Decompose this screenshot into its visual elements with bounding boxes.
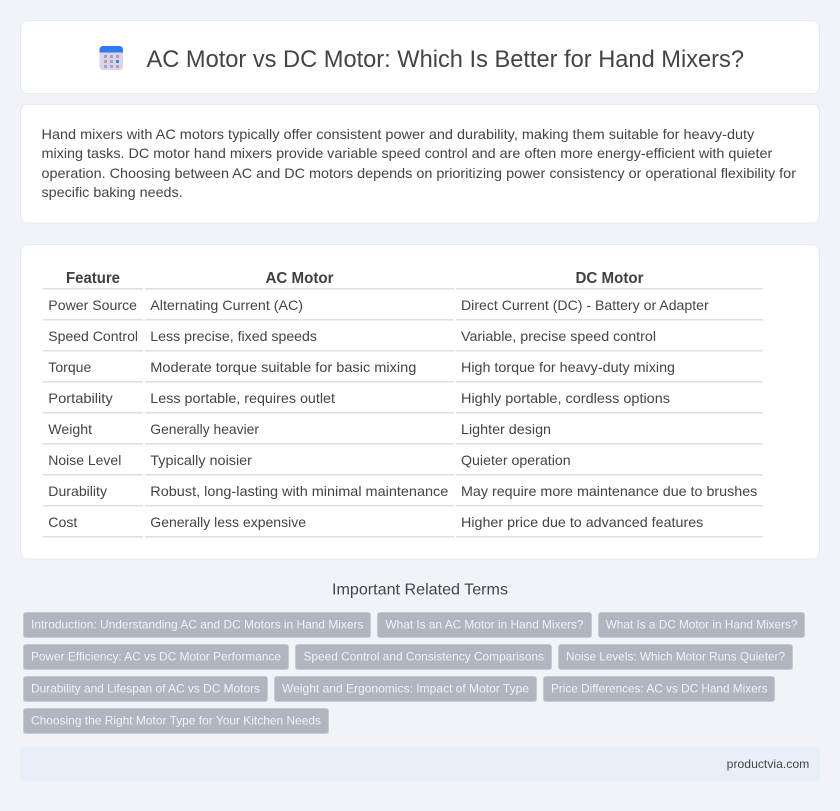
tag: Choosing the Right Motor Type for Your Kitchen Needs — [31, 714, 321, 728]
table row: portability: Highly portable, cordless options — [461, 390, 670, 406]
table row: power source: Direct Current (DC) - Battery or Adapter — [461, 297, 709, 313]
table row: durability: Robust, long-lasting with minimal maintenance — [150, 483, 449, 499]
table row: durability: Durability — [48, 483, 107, 499]
text block: introduction paragraph: Hand mixers with AC motors typically offer consistent power and durability, making them suitable for heavy-duty — [42, 126, 754, 142]
tag: Weight and Ergonomics: Impact of Motor Type — [282, 682, 529, 696]
tag — [558, 644, 792, 670]
table row: durability — [48, 483, 757, 499]
table row: noise level — [48, 452, 571, 468]
table row: portability — [48, 390, 670, 406]
table row: noise level: Noise Level — [48, 452, 121, 468]
tag — [378, 612, 592, 638]
table row: portability: Less portable, requires outlet — [150, 390, 335, 406]
icon: calendar grid — [100, 46, 123, 70]
tag — [274, 676, 536, 702]
table row: cost: Higher price due to advanced features — [461, 514, 703, 530]
panel: introduction — [20, 104, 820, 223]
table row: speed control: Speed Control — [48, 328, 138, 344]
table row: noise level: Typically noisier — [150, 452, 252, 468]
table row: speed control — [48, 328, 656, 344]
table row: power source — [48, 297, 709, 313]
tag: Introduction: Understanding AC and DC Motors in Hand Mixers — [31, 618, 364, 632]
table header row: AC Motor — [266, 270, 334, 287]
table row: torque — [48, 359, 675, 375]
tag — [598, 612, 804, 638]
table header row — [66, 270, 644, 287]
tag — [24, 644, 288, 670]
table row: speed control: Variable, precise speed control — [461, 328, 656, 344]
table row: cost — [48, 514, 703, 530]
table row: power source: Alternating Current (AC) — [150, 297, 303, 313]
table row: weight: Weight — [48, 421, 92, 437]
table row: torque: Moderate torque suitable for basic mixing — [150, 359, 416, 375]
tag — [24, 612, 370, 638]
table row: weight — [48, 421, 551, 437]
tag: Noise Levels: Which Motor Runs Quieter? — [566, 650, 785, 664]
table row: portability: Portability — [48, 390, 113, 406]
panel: comparison table — [20, 244, 820, 559]
tag — [24, 708, 328, 734]
tag: Durability and Lifespan of AC vs DC Motors — [31, 682, 260, 696]
text block: introduction paragraph: specific baking needs. — [42, 184, 183, 200]
title: AC Motor vs DC Motor: Which Is Better for Hand Mixers? — [146, 46, 744, 73]
table row: torque: High torque for heavy-duty mixing — [461, 359, 675, 375]
table row: noise level: Quieter operation — [461, 452, 571, 468]
tag — [544, 676, 774, 702]
table header row: DC Motor — [576, 270, 644, 287]
text block: introduction paragraph: operation. Choosing between AC and DC motors depends on prioritizing power consistency or operational flexibility for — [42, 165, 796, 181]
tag — [24, 676, 268, 702]
text block: introduction paragraph: mixing tasks. DC motor hand mixers provide variable speed control and are often more energy-efficient with quieter — [42, 145, 773, 161]
panel: footer — [20, 747, 820, 781]
tag: Power Efficiency: AC vs DC Motor Performance — [31, 650, 281, 664]
table row: weight: Generally heavier — [150, 421, 259, 437]
tag: Speed Control and Consistency Comparisons — [304, 650, 544, 664]
table header row: Feature — [66, 270, 120, 287]
table row: torque: Torque — [48, 359, 92, 375]
panel: related term tags — [24, 612, 804, 734]
table row: speed control: Less precise, fixed speeds — [150, 328, 317, 344]
table row: cost: Generally less expensive — [150, 514, 306, 530]
text block: introduction paragraph — [42, 126, 796, 200]
panel: title header — [20, 20, 820, 94]
tag: What Is a DC Motor in Hand Mixers? — [606, 618, 798, 632]
table row: cost: Cost — [48, 514, 77, 530]
footer source text: productvia.com — [727, 757, 809, 771]
heading: important related terms: Important Related Terms — [332, 582, 508, 598]
table row: weight: Lighter design — [461, 421, 551, 437]
table row: durability: May require more maintenance due to brushes — [461, 483, 757, 499]
table row: power source: Power Source — [48, 297, 137, 313]
tag: What Is an AC Motor in Hand Mixers? — [386, 618, 584, 632]
tag: Price Differences: AC vs DC Hand Mixers — [551, 682, 768, 696]
tag — [296, 644, 552, 670]
